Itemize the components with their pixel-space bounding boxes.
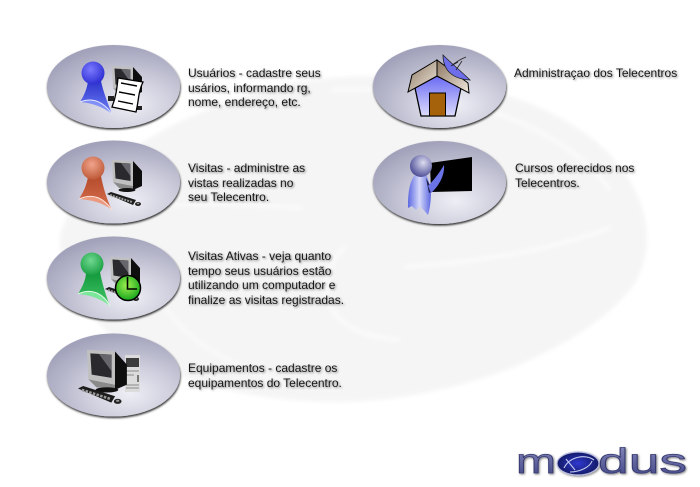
text: visitas ativas: finalize as visitas registradas. [188, 293, 344, 307]
background watermark swoosh [60, 76, 647, 402]
text: usuarios [188, 66, 322, 110]
text: cursos: Telecentros. [515, 176, 580, 190]
panel: equipamentos icon [47, 334, 180, 416]
panel: administracao icon [373, 45, 506, 128]
text: visitas ativas: tempo seus usuários estão [188, 264, 331, 278]
text: visitas [188, 161, 307, 204]
text: equipamentos: equipamentos do Telecentro. [188, 376, 342, 390]
panel: visitas ativas icon [47, 236, 180, 320]
panel: usuarios icon [47, 45, 180, 128]
text: visitas: vistas realizadas no [188, 176, 293, 190]
logo: modus [516, 442, 687, 481]
text: equipamentos [188, 361, 343, 392]
panel: cursos icon [373, 141, 506, 224]
text: visitas ativas [188, 249, 345, 309]
text: usuarios: nome, endereço, etc. [188, 95, 301, 109]
text: equipamentos: Equipamentos - cadastre os [188, 361, 337, 375]
text: usuarios: Usuários - cadastre seus [188, 66, 321, 80]
text: visitas: seu Telecentro. [188, 190, 269, 204]
text: cursos [515, 161, 636, 190]
text: cursos: Cursos oferecidos nos [515, 161, 634, 175]
text: visitas ativas: Visitas Ativas - veja quanto [188, 249, 331, 263]
text: usuarios: usários, informando rg, [188, 81, 311, 95]
logo: modus: dus [598, 442, 687, 481]
logo: modus: m [516, 442, 556, 481]
text: visitas: Visitas - administre as [188, 161, 305, 175]
text: administracao: Administraçao dos Telecentros [514, 66, 677, 80]
panel: visitas icon [47, 140, 180, 224]
text: visitas ativas: utilizando um computador e [188, 278, 335, 292]
